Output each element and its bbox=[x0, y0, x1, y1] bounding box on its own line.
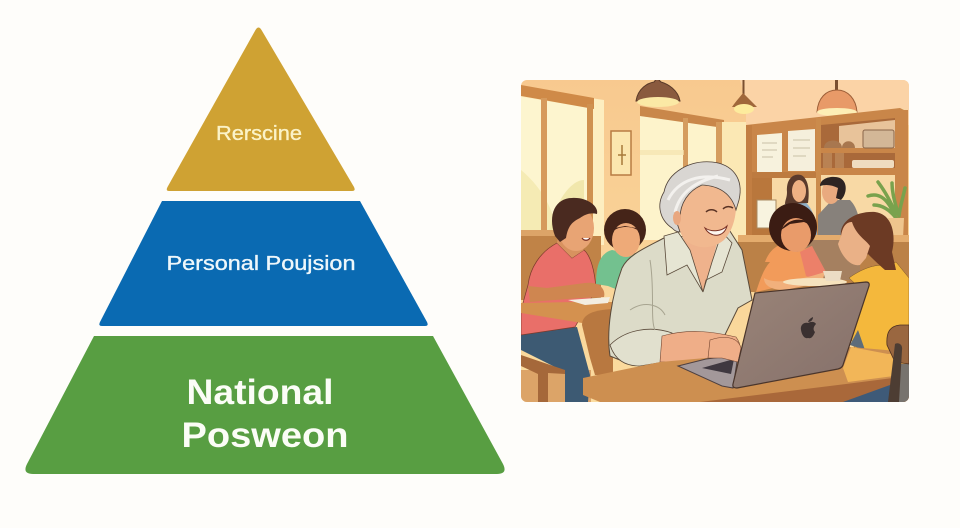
hand on keyboard bbox=[708, 337, 741, 362]
label: National Posweon bbox=[182, 373, 348, 455]
counter sign bbox=[757, 200, 776, 228]
right girl in yellow bbox=[838, 212, 909, 356]
mouth bbox=[582, 238, 590, 240]
neck and collar bbox=[683, 238, 717, 290]
background person: man bbox=[818, 176, 858, 235]
forearm and hand bbox=[660, 331, 740, 362]
head bbox=[562, 214, 594, 251]
jeans bbox=[521, 327, 590, 402]
lid bbox=[733, 282, 869, 388]
label: Personal Poujsion: Personal Poujsion bbox=[166, 253, 356, 275]
label: National Posweon: Posweon bbox=[182, 416, 348, 455]
hair bbox=[552, 198, 597, 242]
background person: woman bbox=[784, 174, 817, 235]
label: Rerscine: Rerscine bbox=[216, 123, 302, 145]
posters bbox=[757, 129, 815, 172]
cafe wall bbox=[521, 80, 909, 402]
label: National Posweon: National bbox=[186, 373, 334, 412]
front table bbox=[583, 347, 909, 402]
ear bbox=[673, 211, 681, 225]
wall shelf unit bbox=[746, 108, 908, 240]
plate and cup bbox=[783, 271, 847, 286]
boy's forearm and hand bbox=[528, 283, 604, 302]
pyramid tier: middle blue bbox=[99, 201, 428, 326]
shirt bbox=[521, 243, 596, 335]
floor and lower chair panel bbox=[521, 370, 591, 402]
wall picture bbox=[611, 131, 631, 175]
illustration: cafe scene with older woman on a laptop bbox=[521, 78, 909, 402]
pendant lamp left bbox=[636, 78, 680, 107]
child in green shirt bbox=[596, 209, 646, 294]
pyramid diagram bbox=[25, 28, 505, 474]
smile and eyes bbox=[705, 226, 727, 235]
potted plant bbox=[868, 182, 905, 238]
pyramid tier: top gold bbox=[167, 28, 355, 191]
hair bbox=[660, 162, 740, 232]
pyramid tier: bottom green bbox=[25, 336, 505, 474]
laptop bbox=[678, 282, 869, 388]
back counter bbox=[521, 230, 909, 300]
neck bbox=[557, 240, 584, 258]
left window bbox=[521, 85, 604, 245]
shelf goods bbox=[821, 118, 895, 168]
boy in coral shirt bbox=[521, 198, 597, 402]
centre girl in orange bbox=[756, 203, 826, 292]
grandmother bbox=[609, 162, 752, 366]
centre window bbox=[640, 106, 746, 242]
pendant lamp right bbox=[817, 80, 857, 116]
pendant lamp centre bbox=[732, 80, 757, 114]
logo bbox=[801, 317, 816, 338]
rear table and paper bbox=[521, 297, 613, 323]
shirt bbox=[609, 228, 752, 365]
left chair bbox=[521, 309, 613, 402]
right chair bbox=[887, 325, 909, 402]
face bbox=[678, 186, 736, 244]
keyboard base bbox=[678, 355, 738, 388]
